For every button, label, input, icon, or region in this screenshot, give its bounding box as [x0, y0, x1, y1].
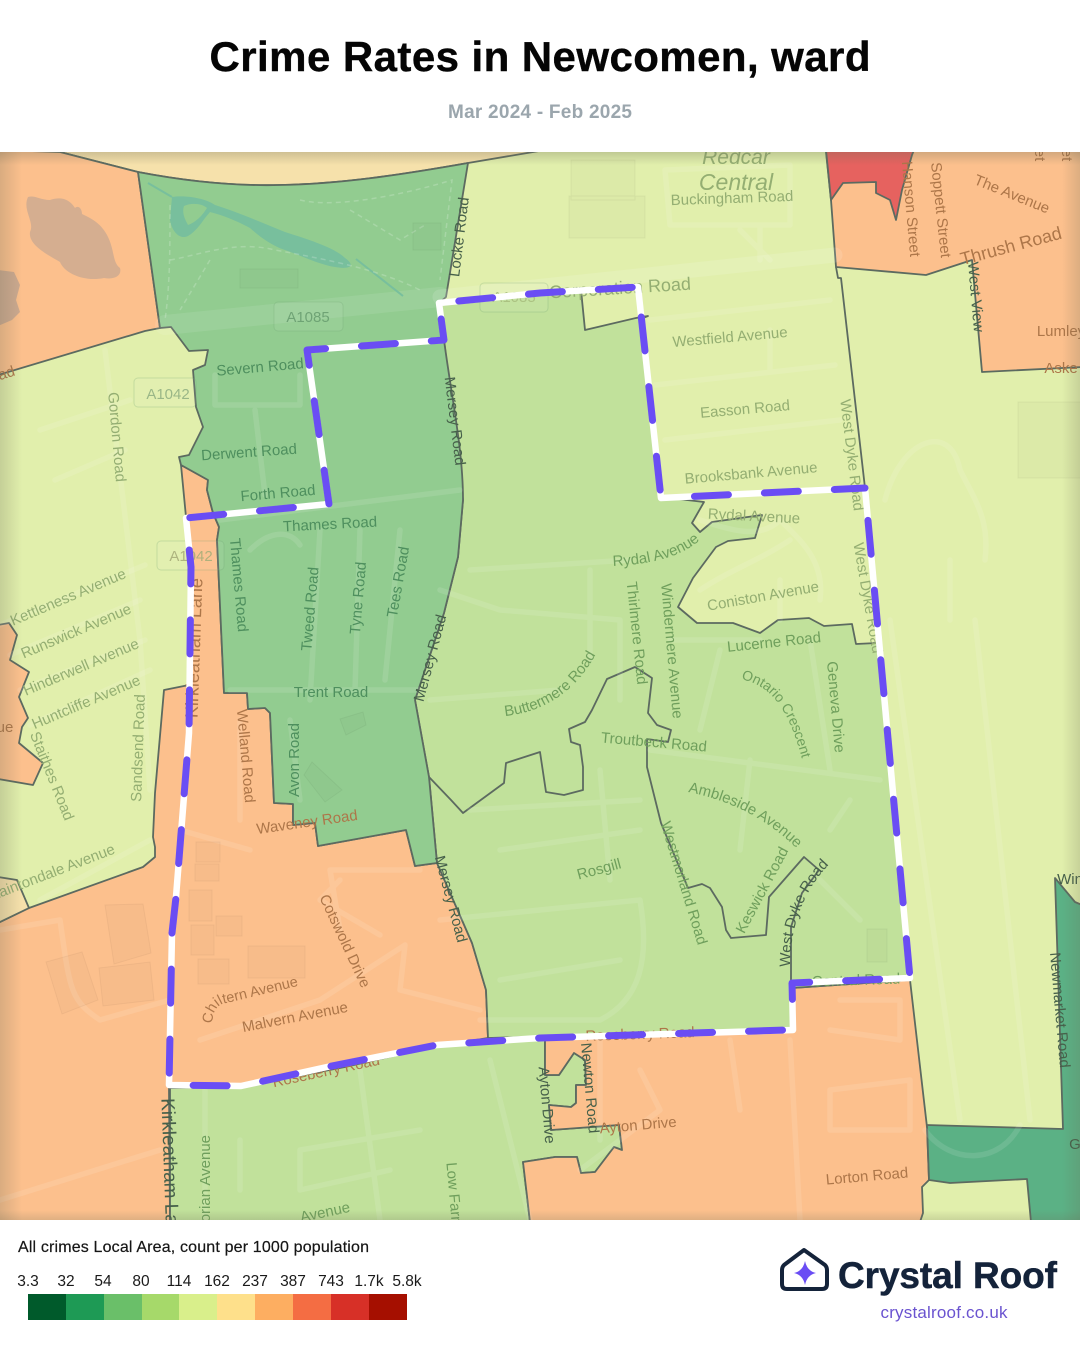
road labels: Tees Road	[384, 545, 413, 619]
road labels: Forth Road	[240, 482, 316, 505]
park dashed paths	[165, 180, 452, 320]
road labels: West Dyke Road	[849, 541, 886, 655]
road labels: Mersey Road	[411, 613, 450, 703]
road labels: Tweed Road	[298, 566, 323, 652]
road labels: Cotswold Drive	[316, 892, 374, 991]
road labels: Hinderwell Avenue	[21, 635, 142, 700]
legend scale labels: 80	[132, 1273, 150, 1290]
brand name: Crystal Roof	[838, 1255, 1058, 1296]
legend scale labels: 3.3	[17, 1273, 39, 1290]
road labels: Hanson Street	[898, 161, 923, 258]
road labels: Thames Road	[283, 514, 378, 535]
road labels: Derwent Road	[201, 441, 297, 464]
road bands: A1085 and Corporation Road	[165, 255, 835, 325]
logo	[782, 1250, 1058, 1322]
road labels: A1042	[169, 548, 213, 565]
road labels: Ambleside Avenue	[688, 782, 800, 847]
legend colour bar	[28, 1294, 407, 1320]
road labels: Trent Road	[294, 684, 368, 701]
road labels: West Dyke Road	[836, 398, 867, 512]
area: park and western teal zone	[138, 163, 468, 866]
road labels: Ayton Drive	[599, 1114, 677, 1137]
legend title: All crimes Local Area, count per 1000 population	[18, 1239, 369, 1256]
website url: crystalroof.co.uk	[880, 1303, 1008, 1322]
road labels: Sandsend Road	[128, 694, 149, 802]
area: south green zone	[170, 1038, 622, 1222]
local roads	[0, 165, 1030, 1220]
school buildings	[46, 160, 1080, 1014]
legend scale labels: 54	[94, 1273, 112, 1290]
road labels: Kirkleatham Lane	[156, 1098, 183, 1246]
park lake	[148, 183, 403, 296]
subtitle: date range: Mar 2024 - Feb 2025	[448, 102, 632, 123]
road labels: A1085	[286, 309, 330, 326]
legend scale labels: 743	[318, 1273, 344, 1290]
road labels: Avon Road	[286, 723, 303, 797]
road labels: Tyne Road	[347, 561, 370, 635]
road labels: West Dyke Road	[780, 858, 828, 966]
road labels: Kettleness Avenue	[8, 565, 129, 630]
road labels: Locke Road	[446, 196, 473, 278]
road labels: Avenue	[299, 1199, 352, 1226]
road labels: Severn Road	[216, 355, 304, 380]
road labels: Westfield Avenue	[672, 324, 788, 351]
legend scale labels: 114	[167, 1273, 192, 1290]
legend scale labels: 32	[57, 1273, 75, 1290]
road labels: Mersey Road	[431, 854, 470, 944]
area: south-west cream corner	[0, 877, 29, 923]
area: south-east orange zone	[523, 980, 929, 1222]
area: west small orange zone	[0, 623, 43, 785]
road labels: Huntcliffe Avenue	[29, 672, 143, 733]
road labels: Buckingham Road	[670, 188, 794, 209]
road labels: A1042	[146, 386, 190, 403]
road labels: Mersey Road	[441, 376, 468, 466]
legend scale labels: 237	[242, 1273, 268, 1290]
area: red high crime zone	[826, 150, 914, 220]
area: central ward green zone	[415, 290, 910, 1038]
road labels: Rydal Avenue	[707, 506, 801, 527]
legend scale labels: 387	[280, 1273, 306, 1290]
legend scale labels	[17, 1273, 422, 1290]
map edge shading	[0, 152, 1080, 1220]
road labels: Geneva Drive	[823, 661, 848, 753]
legend scale labels: 5.8k	[392, 1273, 422, 1290]
area: south-west orange zone	[0, 465, 488, 1222]
road labels: Brooksbank Avenue	[684, 459, 818, 488]
road labels: Thames Road	[226, 537, 251, 633]
road labels: et	[1058, 149, 1075, 162]
road labels: Lucerne Road	[726, 629, 822, 656]
legend scale labels: 1.7k	[354, 1273, 384, 1290]
road badges	[134, 283, 548, 570]
road labels: Rydal Avenue	[614, 536, 698, 568]
road labels: Victorian Avenue	[197, 1135, 214, 1247]
legend	[17, 1239, 422, 1320]
road labels: Ontario Crescent	[742, 670, 810, 758]
area: brown lake	[26, 197, 120, 279]
road labels: Low Farm Drive	[442, 1162, 469, 1269]
road labels: Staithes Road	[26, 729, 77, 823]
road labels: Keswick Road	[733, 844, 792, 936]
road labels: Malvern Avenue	[241, 999, 349, 1036]
road labels: A1085	[492, 289, 536, 306]
road labels: et	[1031, 149, 1048, 162]
road labels: Windermere Avenue	[657, 583, 686, 719]
ward boundary dashed outline	[169, 287, 910, 1086]
road labels: Roseberry Road	[585, 1024, 695, 1045]
road labels: The Avenue	[972, 172, 1052, 217]
road labels: Coniston Avenue	[706, 578, 820, 615]
area: north-east orange zone	[826, 150, 1080, 372]
road labels: Westmorland Road	[657, 819, 710, 947]
road labels: Easson Road	[699, 397, 791, 422]
road labels: Lorton Road	[825, 1164, 909, 1189]
title: Crime Rates in Newcomen, ward	[210, 33, 870, 80]
road labels: Buttermere Road	[504, 650, 596, 716]
road labels: Roseberry Road	[271, 1052, 381, 1091]
road labels: Corporation Road	[548, 274, 692, 302]
area: northern cream band	[64, 152, 538, 184]
road labels: Troutbeck Road	[600, 729, 708, 756]
legend scale labels: 162	[204, 1273, 230, 1290]
road labels: Kirkleatham Lane	[182, 578, 206, 718]
road labels: Newton Road	[577, 1042, 602, 1134]
boundary lines inside ward	[429, 267, 865, 982]
road labels: Central	[699, 169, 774, 195]
road labels: Gordon Road	[104, 391, 129, 483]
road labels: Runswick Avenue	[19, 601, 134, 662]
road labels: West View	[964, 261, 987, 333]
road labels: Redcar	[702, 146, 771, 169]
area: east dark green zone	[927, 878, 1080, 1222]
road labels: Ayton Drive	[535, 1066, 558, 1144]
road labels: Waveney Road	[255, 807, 359, 838]
road labels: Thirlmere Road	[623, 581, 650, 685]
area: north-west orange zone	[0, 150, 160, 375]
road labels: Thrush Road	[958, 223, 1064, 269]
road labels: Welland Road	[233, 709, 258, 804]
area: second brown lake	[0, 270, 20, 326]
road labels: Aske	[1044, 360, 1078, 377]
road labels: Soppett Street	[927, 161, 954, 259]
road labels: Newmarket Road	[1046, 952, 1073, 1069]
road labels: Central Road	[812, 970, 900, 991]
road labels: Rosgill	[575, 855, 623, 884]
icon: house with star	[782, 1250, 827, 1289]
road labels: Chiltern Avenue	[202, 979, 298, 1022]
